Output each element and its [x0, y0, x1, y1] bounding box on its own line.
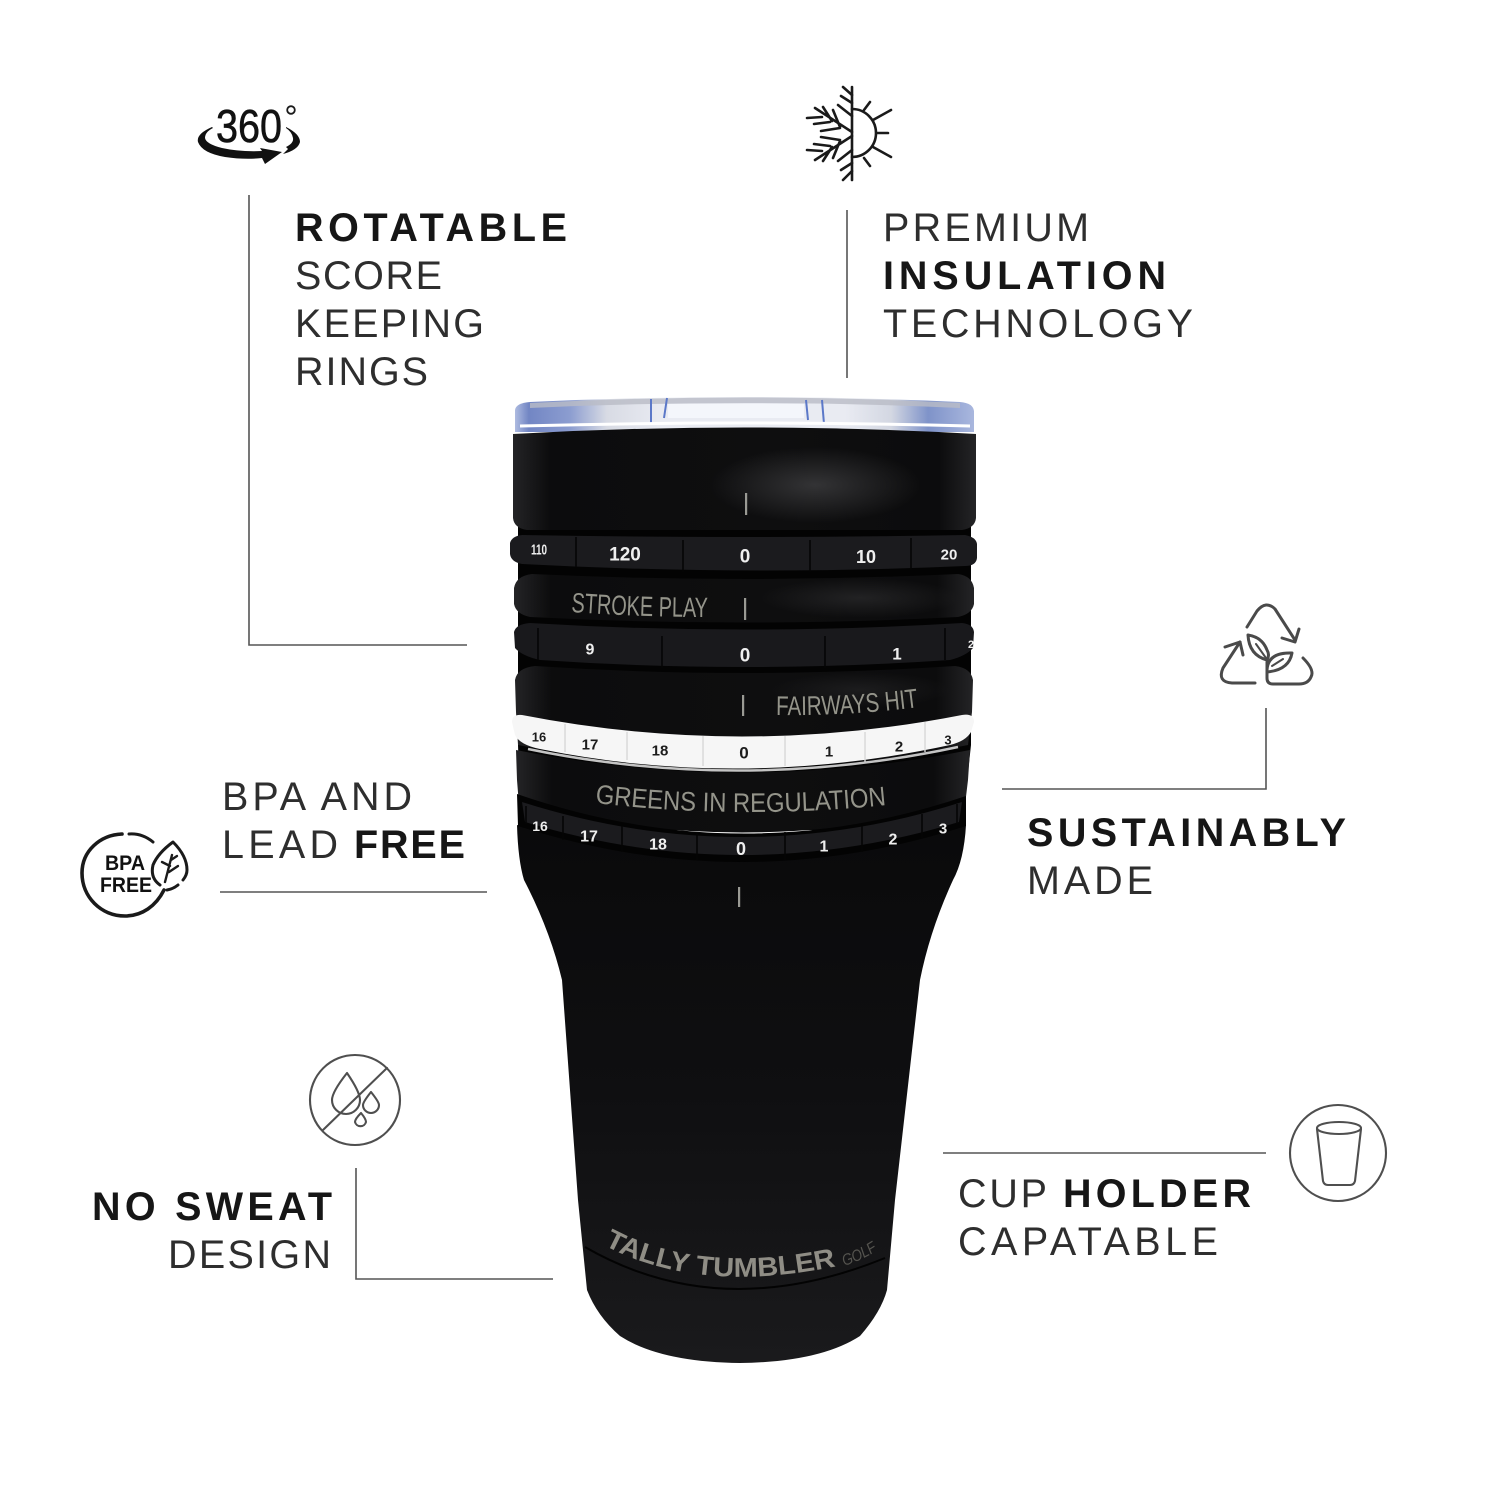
- connector line: [943, 1152, 1266, 1154]
- ring 1 score band: 110: [531, 542, 547, 558]
- icon: 360 rotation: 360: [216, 100, 282, 152]
- middle band: stroke play: STROKE PLAY: [572, 593, 708, 617]
- white score ring: 2: [895, 738, 903, 756]
- ring 4 score band: 1: [820, 838, 829, 856]
- white score ring: 18: [652, 742, 668, 760]
- white score ring: 17: [582, 736, 598, 754]
- text block: [1027, 811, 1346, 903]
- text block: [295, 206, 567, 394]
- ring 1 score band: 0: [740, 546, 750, 568]
- connector line: [356, 1168, 553, 1279]
- ring 2 score band: 0: [740, 646, 750, 666]
- text block: INSULATION: [883, 254, 1166, 298]
- icon: cup in circle: [1290, 1105, 1386, 1201]
- clear lid: [515, 397, 974, 432]
- ring 2 score band: 9: [586, 642, 595, 658]
- icon: BPA free leaf badge: [82, 834, 187, 916]
- callout: no sweat design: [92, 1055, 553, 1279]
- lower flared tumbler body: [517, 825, 966, 1363]
- middle band: greens in regulation: [516, 750, 970, 832]
- ring 4 score band: [517, 794, 966, 862]
- base seam and logo: GOLF: [842, 1240, 875, 1265]
- text block: ROTATABLE: [295, 206, 567, 250]
- callout: premium insulation technology: [807, 87, 1193, 378]
- text block: RINGS: [295, 350, 428, 394]
- ring 4 score band: 0: [736, 839, 746, 859]
- text block: SUSTAINABLY: [1027, 811, 1346, 855]
- connector line: [846, 210, 848, 378]
- text block: NO SWEAT: [92, 1185, 332, 1229]
- text block: HOLDER: [1063, 1172, 1251, 1216]
- ring 1 score band: 20: [941, 546, 957, 564]
- callout: sustainably made: [1002, 605, 1346, 903]
- text block: FREE: [354, 823, 465, 867]
- callout: cup holder capatable: [943, 1105, 1386, 1264]
- text block: MADE: [1027, 859, 1153, 903]
- text block: [222, 775, 465, 867]
- text block: BPA AND: [222, 775, 412, 819]
- text block: [92, 1185, 332, 1277]
- text block: TECHNOLOGY: [883, 302, 1193, 346]
- ring 4 score band: 2: [889, 832, 898, 848]
- text block: LEAD: [222, 823, 338, 867]
- text block: PREMIUM: [883, 206, 1089, 250]
- ring 2 score band: 2: [968, 639, 974, 651]
- ring 1 score band: 10: [856, 547, 876, 567]
- upper tumbler collar: [513, 428, 976, 530]
- ring 4 score band: 17: [580, 828, 598, 846]
- connector line: [249, 195, 467, 645]
- ring 2 score band: 1: [892, 644, 902, 664]
- text block: [958, 1172, 1251, 1264]
- middle band: fairways hit: [515, 666, 973, 764]
- icon: BPA free leaf badge: BPA: [105, 852, 145, 875]
- ring 2 score band: [514, 623, 974, 668]
- icon: crossed-out water drops: [310, 1055, 400, 1145]
- icon: snowflake and sun: [807, 87, 891, 180]
- ring 1 score band: 120: [609, 544, 641, 566]
- ring 4 score band: 16: [532, 818, 548, 834]
- text block: CAPATABLE: [958, 1220, 1218, 1264]
- white score ring: 16: [532, 730, 546, 744]
- icon: 360 rotation: [198, 100, 300, 164]
- middle band: greens in regulation: GREENS IN REGULATION: [597, 785, 884, 812]
- ring 4 score band: 18: [649, 836, 667, 854]
- icon: BPA free leaf badge: FREE: [100, 874, 152, 897]
- text block: [883, 206, 1193, 346]
- white score ring: 3: [944, 732, 952, 748]
- ring 1 score band: [510, 535, 977, 572]
- base seam and logo: TALLY TUMBLER: [610, 1228, 836, 1277]
- dark silhouette behind rings: [518, 440, 971, 830]
- ring 4 score band: 3: [939, 820, 947, 838]
- text block: KEEPING: [295, 302, 484, 346]
- base seam and logo: [584, 1228, 886, 1290]
- white score ring: [512, 715, 974, 771]
- icon: recycle arrows with leaves: [1221, 605, 1312, 684]
- white score ring: 1: [825, 744, 833, 760]
- middle band: stroke play: [514, 574, 974, 622]
- callout: rotatable score keeping rings: [198, 100, 567, 645]
- connector line: [220, 891, 487, 893]
- text block: DESIGN: [168, 1233, 331, 1277]
- middle band: fairways hit: FAIRWAYS HIT: [778, 688, 916, 716]
- white score ring: 0: [739, 744, 749, 762]
- callout: BPA and lead free: [82, 775, 487, 916]
- tumbler product photo: [510, 397, 977, 1363]
- text block: CUP: [958, 1172, 1047, 1216]
- connector line: [1002, 708, 1266, 789]
- text block: SCORE: [295, 254, 442, 298]
